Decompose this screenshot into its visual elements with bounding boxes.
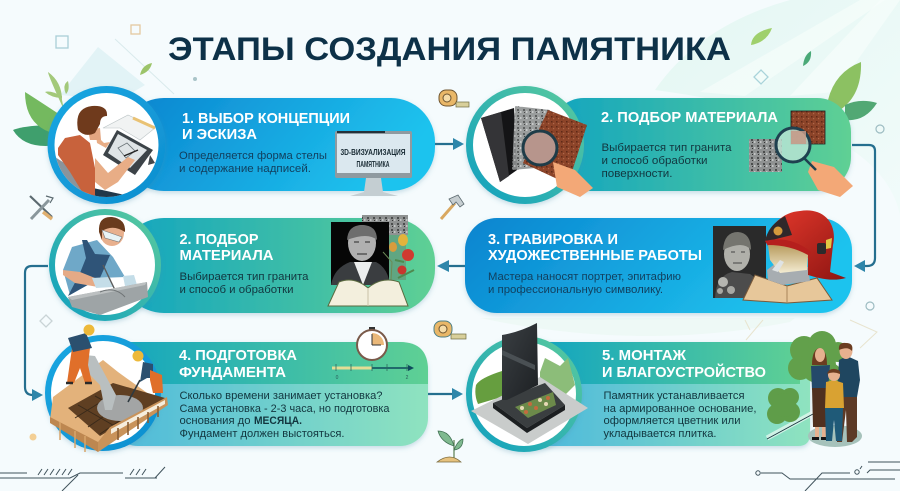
icon: portrait book and flowers [328, 215, 414, 306]
heading: 1. ВЫБОР КОНЦЕПЦИИ [182, 110, 350, 127]
connector arrows [25, 138, 875, 401]
body text: Выбирается тип гранита [602, 142, 732, 154]
heading: 2. ПОДБОР МАТЕРИАЛА [601, 109, 778, 126]
heading [179, 347, 297, 381]
body text: и способ обработки [602, 155, 708, 167]
body text: и содержание надписей. [179, 163, 311, 175]
body text: и способ и обработки [180, 284, 294, 296]
decorative circuit lines [0, 462, 900, 491]
panel: 2 material engraving [49, 209, 435, 321]
heading: 5. МОНТАЖ [602, 347, 686, 364]
body text: Памятник устанавливается [604, 390, 745, 402]
body text: Сколько времени занимает установка? [180, 390, 382, 402]
heading [488, 231, 702, 264]
icon: hammer [441, 195, 464, 219]
body text [602, 142, 732, 180]
icon: circle monument with flowerbed [466, 323, 588, 452]
body text: Сама установка - 2-3 часа, но подготовка [180, 403, 390, 415]
heading: 3. ГРАВИРОВКА И [488, 231, 618, 248]
icon: book and firefighter helmet [743, 210, 846, 303]
body text [180, 271, 309, 296]
panel: 5 installation [466, 323, 862, 452]
body text: Мастера наносят портрет, эпитафию [488, 271, 681, 283]
heading: МАТЕРИАЛА [180, 247, 274, 264]
icon: stopwatch [357, 327, 387, 360]
icon: monitor [335, 131, 412, 196]
timeline: 0 [336, 375, 339, 381]
heading: ФУНДАМЕНТА [179, 364, 286, 381]
leaves top left [13, 63, 152, 146]
panel: 4 foundation [45, 324, 428, 452]
icon: family and greenery [767, 331, 862, 447]
icon: circle designer at tablet [48, 86, 166, 205]
panel: 1 concept and sketch [48, 86, 435, 205]
icon: sprout [437, 431, 463, 462]
icon: measuring tape lower [434, 321, 466, 339]
panel: 3 engraving [465, 210, 852, 313]
icons: tools between panels [30, 90, 469, 462]
body text: основания до [180, 415, 250, 427]
body text: МЕСЯЦА. [254, 415, 302, 427]
body text: Определяется форма стелы [179, 150, 327, 162]
body text: Фундамент должен выстояться. [180, 428, 344, 440]
icon: circle workers pouring concrete [45, 324, 168, 452]
body text: и профессиональную символику. [488, 284, 663, 296]
icon: monitor: 3D-ВИЗУАЛИЗАЦИЯ [340, 148, 406, 157]
body text [180, 390, 390, 440]
heading [182, 110, 350, 143]
panel: 2 material top [466, 86, 853, 204]
body text [488, 271, 681, 296]
heading [602, 347, 766, 381]
body text: оформляется цветник или [604, 415, 740, 427]
icon: wrench and screwdriver [30, 196, 53, 219]
heading: ХУДОЖЕСТВЕННЫЕ РАБОТЫ [488, 247, 702, 264]
body text [604, 390, 756, 440]
body text: поверхности. [602, 168, 672, 180]
leaves top right [751, 28, 877, 120]
body text [179, 150, 327, 175]
body text: укладывается плитка. [604, 428, 716, 440]
icon: measuring tape upper [439, 90, 469, 107]
heading: 2. ПОДБОР [180, 231, 258, 248]
heading: И ЭСКИЗА [182, 126, 257, 143]
icon: circle granite slabs [466, 86, 593, 204]
heading: 4. ПОДГОТОВКА [179, 347, 297, 364]
timeline [332, 364, 414, 381]
heading: И БЛАГОУСТРОЙСТВО [602, 363, 766, 381]
icon: monitor: ПАМЯТНИКА [356, 160, 390, 169]
heading [180, 231, 274, 264]
body text: на армированное основание, [604, 403, 756, 415]
icon: granite samples and magnifier [749, 111, 853, 197]
timeline: 2 [406, 375, 409, 381]
body text: Выбирается тип гранита [180, 271, 309, 283]
icon: circle worker engraving stone [49, 209, 161, 321]
icon: engraved portrait [713, 226, 766, 298]
title: ЭТАПЫ СОЗДАНИЯ ПАМЯТНИКА [168, 31, 731, 67]
